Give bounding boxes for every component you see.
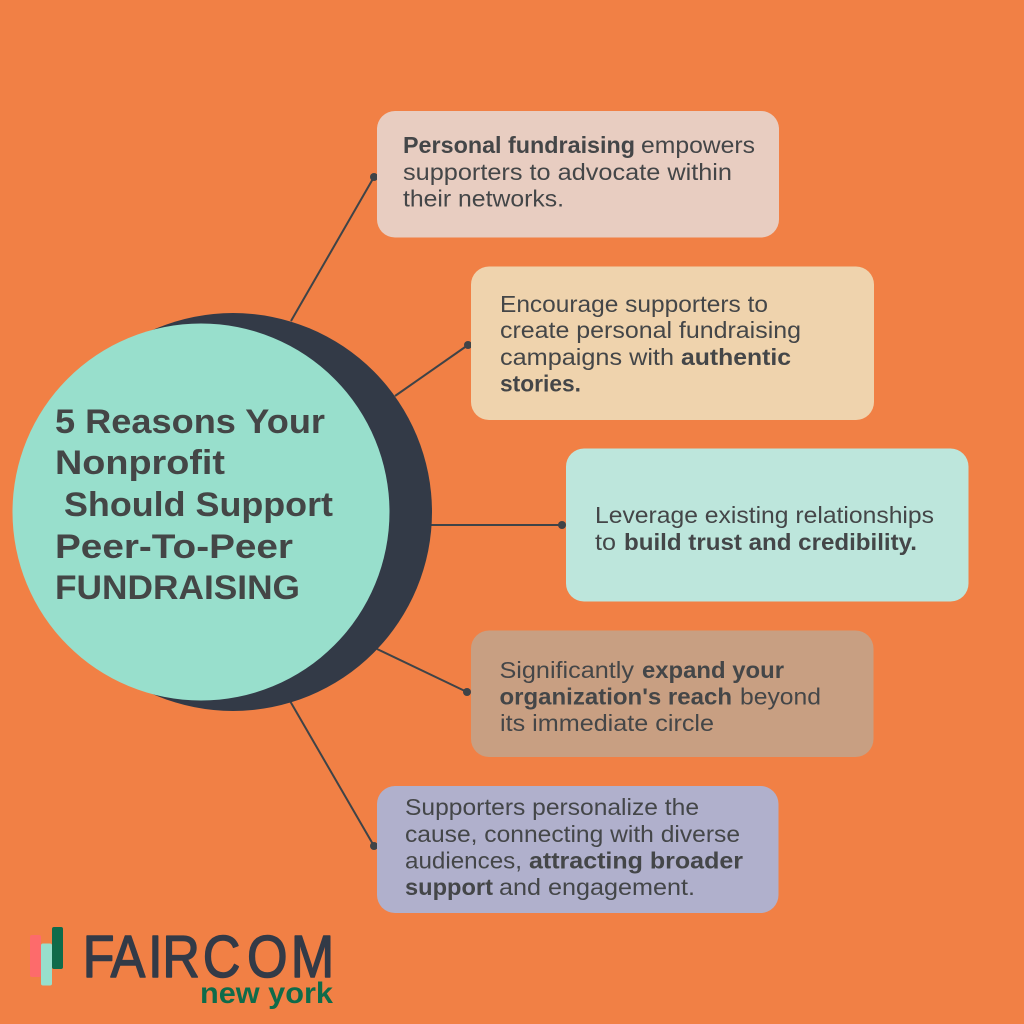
reason 5 text: cause, connecting with diverse: [405, 821, 740, 847]
reason 4 text: Significantly: [500, 657, 635, 683]
dark backing circle: [34, 313, 432, 711]
title: 5 Reasons Your: [55, 403, 325, 441]
reason 3 text: to: [595, 529, 616, 555]
teal circle: [12, 324, 390, 700]
reason 4 text: organization's reach: [500, 684, 732, 710]
reason 5 text: audiences,: [405, 848, 522, 874]
reason 4 text: beyond: [740, 684, 821, 710]
icon: logo bars: [30, 927, 63, 986]
reason 2 text: campaigns with: [500, 344, 674, 370]
reason 4 text: [500, 657, 821, 736]
panel: reason 3: [566, 448, 968, 602]
panel: reason 2: [471, 266, 874, 420]
reason 4 text: expand your: [642, 657, 784, 683]
reason 2 text: Encourage supporters to: [500, 291, 768, 317]
title: FUNDRAISING: [55, 569, 300, 607]
reason 3 text: Leverage existing relationships: [595, 502, 934, 528]
panel: reason 5: [377, 786, 778, 913]
reason 3 text: build trust and credibility.: [624, 529, 917, 555]
reason 2 text: authentic: [681, 344, 791, 370]
subline: new york: [200, 977, 333, 1010]
reason 1 text: supporters to advocate within: [403, 159, 732, 185]
reason 2 text: create personal fundraising: [500, 317, 801, 343]
connector lines: [290, 173, 566, 850]
reason 5 text: attracting broader: [529, 848, 743, 874]
logo: Faircom New York: [30, 924, 334, 1010]
title: Should Support: [64, 486, 333, 524]
central circle with title: [12, 313, 432, 711]
reason 5 text: [405, 794, 743, 900]
reason 3 text: [595, 502, 934, 555]
title: Peer-To-Peer: [55, 528, 293, 566]
wordmark: FAIRCOM: [83, 924, 334, 990]
panel: reason 4: [471, 630, 874, 757]
reason 5 text: Supporters personalize the: [405, 794, 699, 820]
title: Nonprofit: [55, 444, 225, 482]
reason 1 text: [403, 132, 755, 212]
reason 2 text: stories.: [500, 370, 581, 396]
reason 1 text: their networks.: [403, 186, 564, 212]
reason 5 text: and engagement.: [499, 874, 695, 900]
reason 4 text: its immediate circle: [500, 710, 714, 736]
title: [55, 403, 333, 607]
reason 1 text: empowers: [641, 132, 755, 158]
panel: reason 1: [377, 111, 779, 238]
reason 1 text: Personal fundraising: [403, 132, 635, 158]
reason 5 text: support: [405, 874, 493, 900]
reason 2 text: [500, 291, 801, 396]
